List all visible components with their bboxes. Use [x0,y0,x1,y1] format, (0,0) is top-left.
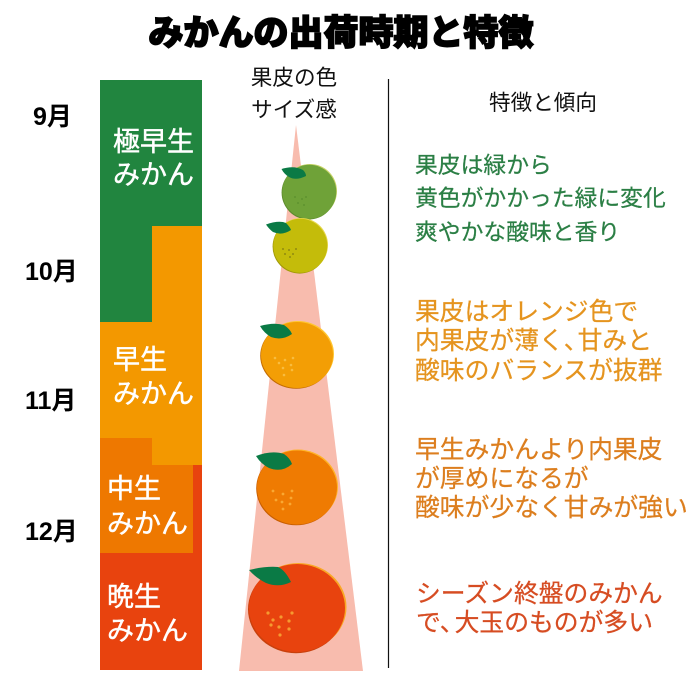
label: mid: みかん [107,509,188,539]
label: extra early: 極早生 [113,127,194,157]
column heading: colour and size: サイズ感 [251,97,337,122]
label: early: 早生 [113,345,167,375]
label: late: みかん [107,616,188,646]
text: early traits: 甘みと [578,327,652,355]
fruit: deep orange [256,450,338,525]
season bar [100,80,202,670]
text: extra early traits: 黄色がかかった緑に変化 [415,185,666,211]
label: extra early: みかん [113,160,194,190]
text: late traits: 大玉のものが多い [455,609,653,637]
text: mid traits: が厚めになるが [415,465,589,493]
label: late: 晩生 [107,582,161,612]
text: late traits: で、 [416,610,465,637]
vertical divider [388,79,390,668]
text: early traits: 酸味のバランスが抜群 [415,357,662,385]
text: late traits: シーズン終盤のみかん [416,581,663,608]
month labels [25,103,78,546]
segment: extra early [100,80,202,322]
fruit: yellow green [266,218,328,274]
fruit: orange [260,321,334,389]
label: mid: 中生 [107,474,161,504]
segment: early [100,226,202,465]
text: mid traits: 酸味が少なく甘みが強い [415,494,688,522]
month labels: 9月 [33,103,72,131]
size triangle [239,125,363,671]
text: extra early traits: 果皮は緑から [415,152,552,178]
segment: mid [100,438,193,553]
text: early traits: 内果皮が薄く、 [415,327,589,355]
text: mid traits: 早生みかんより内果皮 [415,437,662,464]
column heading: characteristics: 特徴と傾向 [489,90,597,115]
month labels: 11月 [25,387,76,415]
title: みかんの出荷時期と特徴 [148,14,534,53]
month labels: 12月 [25,518,78,546]
segment: late [100,465,202,670]
fruit: green [282,164,337,220]
label: early: みかん [113,379,194,409]
month labels: 10月 [25,258,78,286]
fruit: red orange [248,563,346,653]
text: early traits: 果皮はオレンジ色で [415,299,638,326]
text: extra early traits: 爽やかな酸味と香り [415,219,620,245]
column heading: colour and size: 果皮の色 [251,65,337,90]
